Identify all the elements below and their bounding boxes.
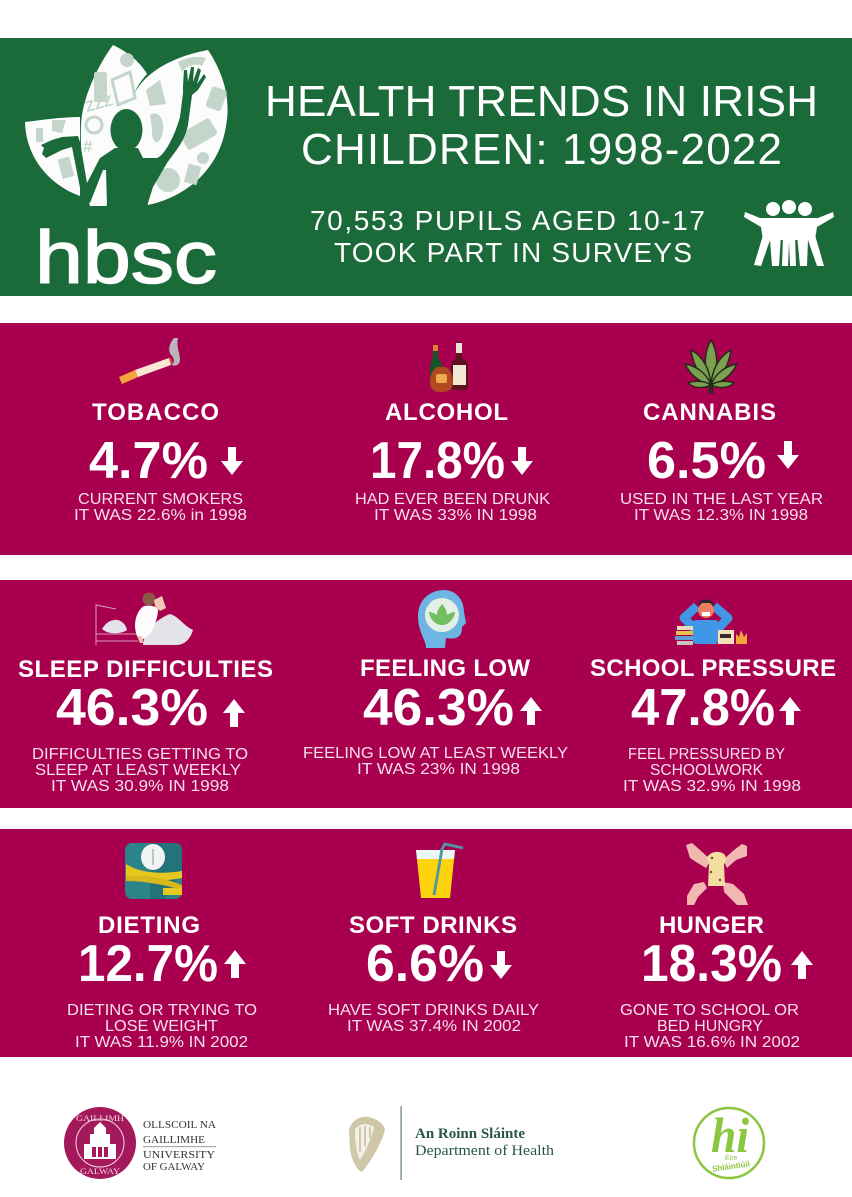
stat: soft drinks: 6.6% <box>366 935 484 993</box>
logo: University of Galway: GAILLIMHE <box>143 1134 205 1146</box>
logo: Department of Health: Department of Health <box>415 1143 555 1159</box>
logo: University of Galway: OF GALWAY <box>143 1161 205 1173</box>
logo: University of Galway: OLLSCOIL NA <box>143 1119 216 1131</box>
stat: alcohol: ALCOHOL <box>385 399 508 426</box>
stat: tobacco: 4.7% <box>89 432 208 490</box>
logo: Healthy Ireland <box>694 1107 764 1178</box>
logo pictograms <box>36 53 228 192</box>
logo: University of Galway: UNIVERSITY <box>143 1149 215 1161</box>
logo pictograms: # <box>83 137 93 156</box>
stat: hunger: HUNGER <box>659 912 764 939</box>
stat: dieting <box>67 912 257 1051</box>
stat: feeling low <box>303 655 568 778</box>
logo wordmark: hbsc <box>35 216 217 299</box>
stat: feeling low: FEELING LOW AT LEAST WEEKLY <box>303 745 568 762</box>
stat: feeling low: FEELING LOW <box>360 655 530 682</box>
logo: Healthy Ireland: Éire <box>725 1153 738 1162</box>
icon: hands sharing bread <box>686 843 748 905</box>
stat: alcohol: HAD EVER BEEN DRUNK <box>355 491 550 508</box>
stat: dieting: 12.7% <box>78 935 218 993</box>
stat: alcohol: 17.8% <box>370 432 505 490</box>
logo: Healthy Ireland: hi <box>711 1107 749 1163</box>
stat: dieting: DIETING OR TRYING TO <box>67 1002 257 1019</box>
panel: header <box>0 38 852 299</box>
subtitle <box>310 205 705 268</box>
logo figure <box>41 67 206 206</box>
stat: soft drinks: IT WAS 37.4% IN 2002 <box>347 1018 521 1035</box>
stat: school pressure: IT WAS 32.9% IN 1998 <box>623 778 801 795</box>
icon: weighing scale with tape <box>125 843 182 899</box>
icon: alcohol bottles <box>430 342 468 392</box>
stat: dieting: DIETING <box>98 912 200 939</box>
stat: cannabis: IT WAS 12.3% IN 1998 <box>634 507 808 524</box>
stat: dieting: LOSE WEIGHT <box>105 1018 218 1035</box>
stat: alcohol <box>355 399 550 524</box>
subtitle: TOOK PART IN SURVEYS <box>334 237 692 268</box>
stat: cannabis: 6.5% <box>647 432 766 490</box>
logo leaves <box>25 45 228 206</box>
stat: sleep difficulties: SLEEP AT LEAST WEEKLY <box>35 762 241 779</box>
stat: sleep difficulties: IT WAS 30.9% IN 1998 <box>51 778 229 795</box>
stat: dieting: IT WAS 11.9% IN 2002 <box>75 1034 248 1051</box>
stat: hunger: BED HUNGRY <box>657 1018 763 1035</box>
stat: hunger <box>620 912 813 1051</box>
logo: Healthy Ireland: Shláintiúil <box>711 1159 750 1174</box>
icon: cannabis leaf <box>685 340 737 393</box>
title: HEALTH TRENDS IN IRISH <box>265 77 818 126</box>
panel: substance use <box>0 323 852 555</box>
stat: hunger: 18.3% <box>641 935 782 993</box>
stat: school pressure <box>590 655 836 795</box>
icon: stressed student <box>675 600 747 645</box>
stat: cannabis <box>620 399 823 524</box>
panel: wellbeing <box>0 580 852 808</box>
logo: University of Galway: GAILLIMH <box>76 1114 124 1123</box>
subtitle: 70,553 PUPILS AGED 10-17 <box>310 205 705 236</box>
stat: alcohol: IT WAS 33% IN 1998 <box>374 507 537 524</box>
stat: school pressure: FEEL PRESSURED BY <box>628 746 785 763</box>
stat: tobacco: TOBACCO <box>92 399 219 426</box>
icon: cigarette <box>119 338 180 384</box>
stat: soft drinks: SOFT DRINKS <box>349 912 517 939</box>
stat: sleep difficulties <box>18 656 273 795</box>
logo: hbsc <box>25 45 228 299</box>
title: CHILDREN: 1998-2022 <box>301 125 782 174</box>
stat: cannabis: CANNABIS <box>643 399 776 426</box>
stat: school pressure: SCHOOLWORK <box>650 762 763 779</box>
icon: glass of juice <box>416 844 463 898</box>
stat: school pressure: SCHOOL PRESSURE <box>590 655 836 682</box>
stat: hunger: IT WAS 16.6% IN 2002 <box>624 1034 800 1051</box>
stat: tobacco <box>74 399 247 524</box>
stat: cannabis: USED IN THE LAST YEAR <box>620 491 823 508</box>
stat: hunger: GONE TO SCHOOL OR <box>620 1002 799 1019</box>
logo: University of Galway <box>64 1107 216 1179</box>
stat: tobacco: IT WAS 22.6% in 1998 <box>74 507 247 524</box>
panel: diet <box>0 829 852 1057</box>
stat: feeling low: 46.3% <box>363 679 514 737</box>
logo: Department of Health <box>349 1106 555 1180</box>
stat: school pressure: 47.8% <box>631 679 775 737</box>
logo: Department of Health: An Roinn Sláinte <box>415 1126 525 1142</box>
stat: sleep difficulties: DIFFICULTIES GETTING TO <box>32 746 248 763</box>
icon: sleepless person in bed <box>96 592 193 645</box>
stat: soft drinks: HAVE SOFT DRINKS DAILY <box>328 1002 539 1019</box>
logo: University of Galway: GALWAY <box>80 1167 120 1176</box>
stat: tobacco: CURRENT SMOKERS <box>78 491 243 508</box>
stat: soft drinks <box>328 912 539 1035</box>
title <box>265 77 818 174</box>
logo pictograms: ZZZ <box>84 92 115 116</box>
stat: sleep difficulties: 46.3% <box>56 679 208 737</box>
stat: feeling low: IT WAS 23% IN 1998 <box>357 761 520 778</box>
stat: sleep difficulties: SLEEP DIFFICULTIES <box>18 656 273 683</box>
icon: group of pupils <box>744 200 834 266</box>
icon: head with leaf <box>418 590 466 648</box>
